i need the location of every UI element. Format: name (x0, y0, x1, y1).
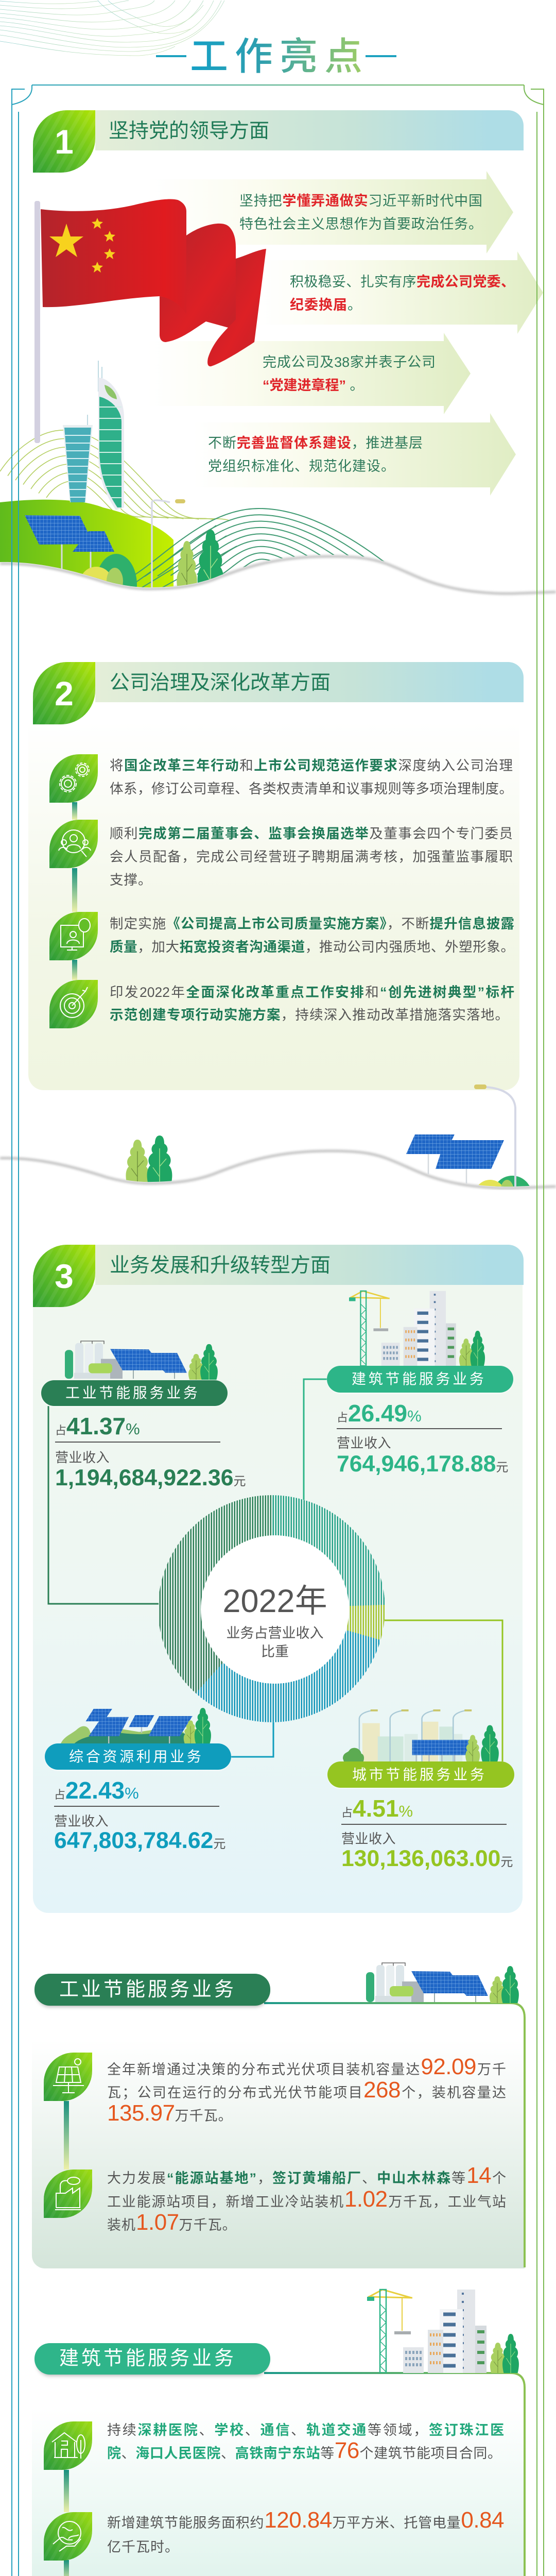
stat: city: 130,136,063.00元 (341, 1846, 513, 1871)
stat: industry: 营业收入 (55, 1450, 110, 1465)
section header bar: 公司治理及深化改革方面 (110, 672, 331, 694)
donut chart (160, 1495, 385, 1722)
text: item 3: 质量，加大拓宽投资者沟通渠道，推动公司内强质地、外塑形象。 (110, 939, 514, 954)
text: item 2: 支撑。 (110, 872, 152, 887)
icon: green factory (44, 2170, 92, 2218)
text: item 2: 会人员配备，完成公司经营班子聘期届满考核，加强董监事履职 (110, 849, 513, 865)
icon: gears (49, 754, 98, 803)
text: item 1 (110, 757, 513, 796)
panel: 坚持党的领导方面 (0, 110, 556, 596)
section number leaf: 3 (55, 1257, 74, 1295)
text: item 3 (110, 916, 514, 954)
text: arrow 2: 纪委换届。 (290, 297, 362, 312)
stat: industry: 1,194,684,922.36元 (55, 1465, 246, 1490)
stat: buildings: 营业收入 (337, 1435, 391, 1451)
text: item 2: 顺利完成第二届董事会、监事会换届选举及董事会四个专门委员 (110, 825, 513, 841)
panel: 公司治理及深化改革方面 (0, 662, 556, 1190)
connectors (72, 802, 77, 912)
icon: green house (44, 2421, 92, 2470)
stat: city (341, 1798, 519, 1870)
panel: 建筑节能服务业务 (0, 2289, 556, 2576)
text: arrow 2 (290, 274, 515, 312)
heading pill: 工业节能服务业务 (59, 1979, 236, 2001)
illustration: buildings (367, 2289, 519, 2373)
illustration: industry (365, 1962, 519, 2003)
card background (32, 2373, 525, 2576)
section header bar (95, 110, 524, 150)
heading pill (34, 1974, 270, 2006)
text: arrow 1 (239, 193, 482, 232)
section number leaf (33, 1245, 95, 1307)
text: arrow 3: “党建进章程” 。 (263, 377, 364, 393)
section number leaf: 1 (55, 123, 74, 161)
text: item 1: 135.97万千瓦。 (107, 2100, 233, 2126)
section 1 artwork (0, 171, 556, 596)
text: item 1: 持续深耕医院、学校、通信、轨道交通等领域，签订珠江医 (107, 2422, 504, 2438)
text: item 1: 瓦；公司在运行的分布式光伏节能项目268个，装机容量达 (107, 2077, 506, 2103)
text: item 4: 示范创建专项行动实施方案，持续深入推动改革措施落实落地。 (110, 1007, 509, 1022)
text: item 2: 新增建筑节能服务面积约120.84万平方米、托管电量0.84 (107, 2507, 504, 2533)
text: item 2: 装机1.07万千瓦。 (107, 2210, 237, 2235)
panel background (28, 721, 519, 1090)
donut centre text (222, 1583, 327, 1659)
scene: wave with trees, solar panels and lamp (0, 1084, 556, 1190)
label: 工业节能服务业务 (41, 1380, 228, 1406)
text: item 2 (107, 2167, 506, 2237)
text: item 2: 工业能源站项目，新增工业冷站装机1.02万千瓦，工业气站 (107, 2187, 506, 2211)
text: item 4 (110, 984, 514, 1022)
stat: industry: 占41.37% (55, 1413, 140, 1439)
flag (34, 199, 266, 443)
label: 城市节能服务业务 (327, 1761, 514, 1788)
text: arrow 2: 积极稳妥、扎实有序完成公司党委、 (290, 274, 515, 290)
label: 综合资源利用业务: 综合资源利用业务 (69, 1749, 204, 1765)
donut centre text: 2022年 (222, 1583, 327, 1619)
text: item 1 (107, 2418, 504, 2465)
stat: resources (54, 1780, 232, 1852)
text: item 1: 院、海口人民医院、高铁南宁东站等76个建筑节能项目合同。 (107, 2438, 501, 2463)
panel background (33, 1284, 523, 1913)
icon: target (49, 980, 98, 1028)
stat: resources: 营业收入 (54, 1814, 109, 1829)
text: item 4: 印发2022年全面深化改革重点工作安排和“创先进树典型”标杆 (110, 984, 514, 999)
stat: city: 营业收入 (341, 1831, 396, 1846)
illustration: city lamps (342, 1709, 499, 1761)
text: item 1: 将国企改革三年行动和上市公司规范运作要求深度纳入公司治理 (110, 757, 513, 773)
heading pill (34, 2343, 270, 2375)
connector lines (47, 1379, 503, 1761)
icon: globe in hand (44, 2512, 92, 2561)
panel: 业务发展和升级转型方面 (33, 1245, 524, 1913)
text: item 2 (110, 825, 513, 887)
stat: resources: 占22.43% (54, 1777, 139, 1804)
text: arrow 3: 完成公司及38家并表子公司 (263, 354, 436, 370)
stat: industry (55, 1413, 246, 1490)
text: arrow 4: 不断完善监督体系建设，推进基层 (208, 435, 423, 450)
donut centre text: 业务占营业收入 (227, 1625, 323, 1641)
stat: buildings (337, 1403, 514, 1475)
stat: resources: 647,803,784.62元 (54, 1828, 225, 1853)
illustration: industry (65, 1341, 218, 1380)
section number leaf: 2 (55, 674, 74, 713)
donut centre text: 比重 (261, 1644, 289, 1659)
icon: solar panel (44, 2053, 92, 2101)
section number leaf (33, 110, 95, 173)
label: 综合资源利用业务 (45, 1743, 231, 1770)
text: item 2: 大力发展“能源站基地”，签订黄埔船厂、中山木林森等14个 (107, 2163, 506, 2188)
text: item 1 (107, 2058, 506, 2128)
text: arrow 4 (208, 435, 423, 474)
text: item 2 (107, 2511, 504, 2560)
section header bar (95, 662, 524, 702)
text: item 1: 全年新增通过决策的分布式光伏项目装机容量达92.09万千 (107, 2054, 506, 2079)
text: arrow 3 (263, 354, 436, 393)
stat: buildings: 占26.49% (337, 1400, 422, 1427)
section header bar (95, 1245, 524, 1285)
heading pill: 建筑节能服务业务 (59, 2348, 236, 2369)
label: 建筑节能服务业务: 建筑节能服务业务 (352, 1371, 486, 1387)
scene: hills, buildings and solar panels (0, 556, 556, 594)
text: item 2: 亿千瓦时。 (107, 2539, 179, 2554)
text: arrow 1: 特色社会主义思想作为首要政治任务。 (239, 216, 482, 232)
label: 建筑节能服务业务 (327, 1366, 513, 1393)
connectors (64, 2470, 69, 2576)
arrows (147, 171, 543, 496)
card outline (0, 2002, 556, 2268)
decorative wave lines: top left (0, 0, 224, 56)
illustration: buildings (349, 1290, 485, 1366)
icon: people search (49, 820, 98, 868)
text: arrow 4: 党组织标准化、规范化建设。 (208, 459, 395, 474)
section number leaf (33, 662, 95, 724)
stat: city: 占4.51% (341, 1795, 413, 1822)
text: item 3: 制定实施《公司提高上市公司质量实施方案》，不断提升信息披露 (110, 916, 514, 931)
label: 城市节能服务业务: 城市节能服务业务 (352, 1767, 487, 1783)
title: 工作亮点 (190, 35, 369, 78)
icon: online screen (49, 912, 98, 960)
text: item 1: 体系，修订公司章程、各类权责清单和议事规则等多项治理制度。 (110, 781, 513, 796)
section header bar: 业务发展和升级转型方面 (110, 1255, 331, 1277)
panel: 工业节能服务业务 (0, 1962, 556, 2268)
label: 工业节能服务业务: 工业节能服务业务 (65, 1385, 200, 1401)
text: arrow 1: 坚持把学懂弄通做实习近平新时代中国 (239, 193, 482, 208)
illustration: solar field (61, 1708, 212, 1743)
section header bar: 坚持党的领导方面 (109, 120, 269, 142)
card background (32, 2003, 525, 2268)
card outline (0, 2372, 556, 2576)
stat: buildings: 764,946,178.88元 (337, 1451, 508, 1477)
connector (64, 2101, 69, 2170)
